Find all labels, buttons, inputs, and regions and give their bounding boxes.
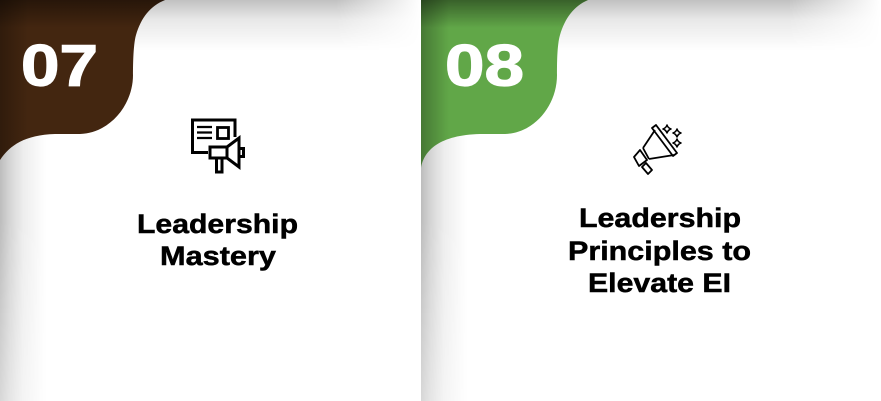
heading: Leadership Principles to Elevate EI — [568, 203, 751, 298]
icon: megaphone with sparkles — [634, 125, 681, 174]
panel: card 07 — [0, 0, 421, 401]
number 07: 07 — [21, 34, 98, 98]
icon: presentation board with megaphone — [192, 120, 244, 172]
heading: Leadership Principles to Elevate EI: Elevate EI — [588, 268, 731, 298]
number 08: 08 — [445, 34, 524, 98]
heading: Leadership Principles to Elevate EI: Leadership — [579, 203, 741, 233]
heading: Leadership Mastery: Mastery — [160, 241, 276, 271]
badge: brown number shape — [0, 0, 170, 165]
heading: Leadership Principles to Elevate EI: Principles to — [568, 236, 751, 266]
panel: card 08 — [421, 0, 881, 401]
heading: Leadership Mastery — [137, 209, 298, 271]
heading: Leadership Mastery: Leadership — [137, 209, 298, 239]
badge: green number shape — [421, 0, 591, 170]
